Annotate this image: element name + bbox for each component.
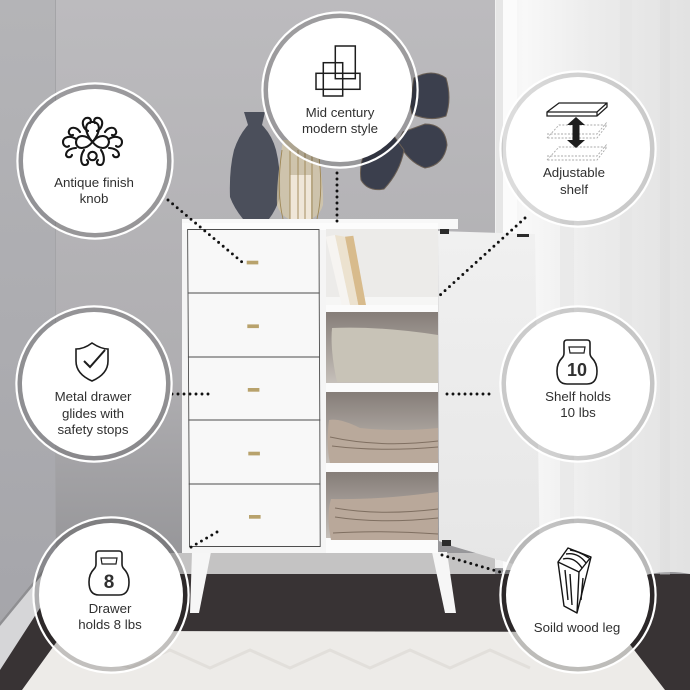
label: Shelf holds bbox=[545, 389, 611, 404]
open shelves bbox=[326, 229, 438, 553]
callout: mid century modern style bbox=[262, 12, 418, 168]
icon: kettlebell 8 bbox=[89, 551, 129, 595]
label: shelf bbox=[560, 182, 588, 197]
curtain bbox=[495, 0, 690, 577]
label: safety stops bbox=[58, 422, 129, 437]
icon: shield with check bbox=[76, 343, 108, 381]
folded towels, middle shelf bbox=[328, 420, 438, 463]
label: holds 8 lbs bbox=[78, 617, 142, 632]
books bbox=[326, 235, 366, 305]
label: modern style bbox=[302, 121, 378, 136]
label: 10 lbs bbox=[560, 405, 596, 420]
drawer handles bbox=[247, 261, 261, 519]
label: Soild wood leg bbox=[534, 620, 620, 635]
callout: shelf holds 10 lbs bbox=[500, 306, 656, 462]
icon: kettlebell 8: 8 bbox=[104, 572, 114, 593]
icon: kettlebell 10 bbox=[557, 340, 597, 384]
callout: antique finish knob bbox=[17, 83, 173, 239]
callout: solid wood leg bbox=[500, 517, 656, 673]
label: Mid century bbox=[306, 105, 375, 120]
hinges bbox=[440, 229, 529, 546]
icon: wood post bbox=[558, 548, 591, 613]
folded towels, bottom shelf bbox=[328, 492, 438, 540]
dotted leader lines bbox=[168, 173, 525, 572]
label: Adjustable bbox=[543, 165, 605, 180]
vase bbox=[230, 112, 280, 220]
icon: kettlebell 10: 10 bbox=[567, 360, 587, 380]
open door bbox=[438, 231, 540, 572]
icon: overlapping rectangles bbox=[316, 46, 360, 96]
gold lantern with candle bbox=[277, 140, 323, 221]
label: Antique finish bbox=[54, 175, 134, 190]
callout: drawer holds 8 lbs bbox=[33, 517, 189, 673]
cabinet legs bbox=[190, 552, 456, 613]
rug bbox=[22, 631, 665, 690]
cabinet bbox=[182, 219, 540, 572]
label: knob bbox=[80, 191, 108, 206]
label: glides with bbox=[62, 406, 124, 421]
icon: shelf with arrow bbox=[547, 103, 607, 160]
icon: ornate knob bbox=[63, 118, 122, 165]
callout: metal drawer glides bbox=[16, 306, 172, 462]
label: Metal drawer bbox=[55, 389, 132, 404]
callout: adjustable shelf bbox=[500, 71, 656, 227]
drawers bbox=[188, 230, 320, 546]
wall art: fan decoration bbox=[360, 73, 449, 190]
label: Drawer bbox=[89, 601, 132, 616]
folded blanket, top shelf bbox=[332, 328, 438, 383]
